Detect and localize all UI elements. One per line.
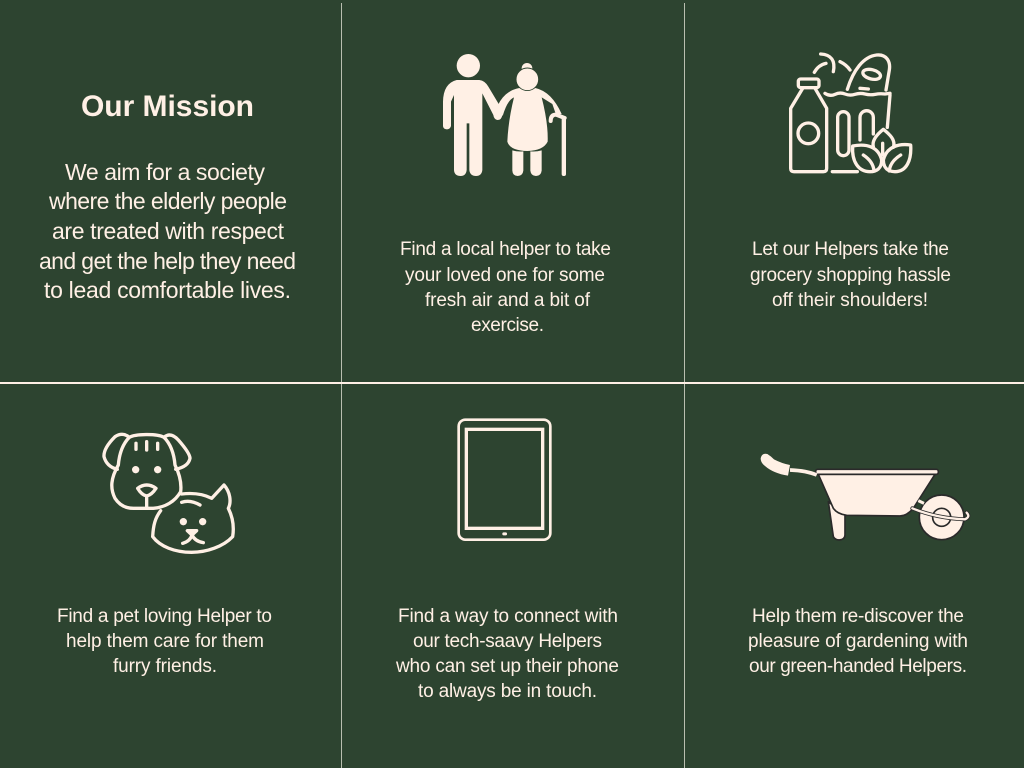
text block: gardening description: [748, 606, 968, 677]
text block: mission statement: to lead comfortable lives.: [44, 277, 291, 303]
text block: mission statement: where the elderly people: [48, 188, 287, 214]
text block: mission statement: We aim for a society: [65, 159, 266, 185]
text block: pets description: help them care for them: [66, 631, 264, 652]
text block: mission statement: are treated with respect: [52, 218, 285, 244]
text block: gardening description: pleasure of gardening with: [748, 631, 968, 652]
text block: gardening description: Help them re-discover the: [752, 606, 964, 627]
text block: walking description: your loved one for some: [405, 265, 605, 286]
text block: groceries description: Let our Helpers take the: [752, 239, 949, 260]
text block: technology description: [395, 606, 619, 702]
text block: mission statement: [39, 159, 296, 303]
panel: gardening: [748, 454, 968, 677]
icon: dog and cat: [104, 434, 233, 552]
text block: technology description: Find a way to connect with: [398, 606, 618, 627]
heading: Our Mission: Our Mission: [81, 90, 254, 123]
text block: mission statement: and get the help they need: [39, 248, 296, 274]
panel: groceries: [750, 54, 951, 311]
text block: groceries description: grocery shopping hassle: [750, 265, 951, 286]
text block: walking description: fresh air and a bit of: [425, 290, 591, 311]
panel: pets: [57, 434, 272, 677]
panel: our mission: [39, 90, 296, 303]
panel: technology: [395, 420, 619, 702]
text block: pets description: Find a pet loving Helper to: [57, 606, 272, 627]
text block: groceries description: off their shoulders!: [772, 290, 928, 311]
text block: gardening description: our green-handed Helpers.: [749, 656, 967, 677]
text block: walking description: [400, 239, 611, 336]
text block: pets description: furry friends.: [113, 656, 217, 677]
text block: technology description: who can set up their phone: [395, 656, 619, 677]
icon: elderly woman and helper: [443, 54, 566, 176]
text block: technology description: our tech-saavy Helpers: [413, 631, 602, 652]
icon: wheelbarrow: [761, 454, 968, 540]
text block: technology description: to always be in touch.: [418, 681, 597, 702]
text block: walking description: Find a local helper to take: [400, 239, 611, 260]
icon: grocery bag with bottle: [791, 54, 911, 172]
text block: groceries description: [750, 239, 951, 311]
panel: walking: [400, 54, 611, 336]
text block: walking description: exercise.: [471, 315, 544, 336]
icon: tablet: [459, 420, 550, 540]
text block: pets description: [57, 606, 272, 677]
